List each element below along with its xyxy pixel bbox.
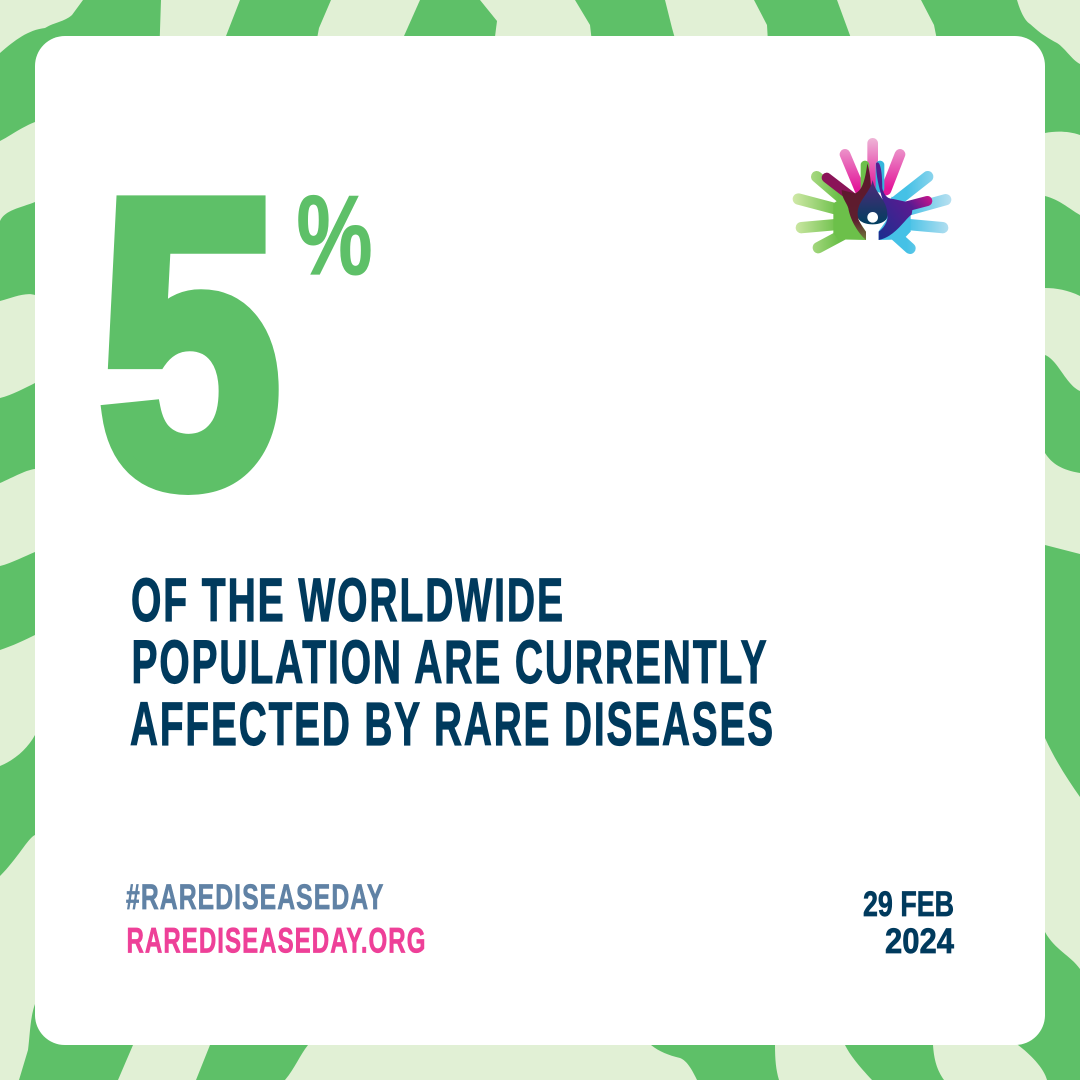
purple hand [876, 162, 927, 240]
date: year: 2024 [885, 922, 954, 961]
white figure body [858, 218, 887, 240]
heading line 1: OF THE WORLDWIDE [131, 566, 565, 634]
icon: rare disease day logo hands [798, 143, 946, 248]
white figure head [867, 212, 878, 223]
date [863, 885, 954, 961]
heading: affected population statement [130, 566, 775, 758]
pink fingers [845, 143, 900, 190]
percent sign: % [296, 172, 372, 298]
maroon hand [827, 163, 871, 240]
big number: 5: 5 [98, 117, 281, 569]
central drop [858, 180, 887, 227]
green hand [798, 165, 866, 248]
date: day and month: 29 FEB [863, 885, 954, 924]
hashtag: #RAREDISEASEDAY [126, 878, 384, 917]
blue hand [879, 177, 946, 248]
website: RAREDISEASEDAY.ORG [126, 922, 426, 960]
cyan finger [867, 165, 893, 188]
